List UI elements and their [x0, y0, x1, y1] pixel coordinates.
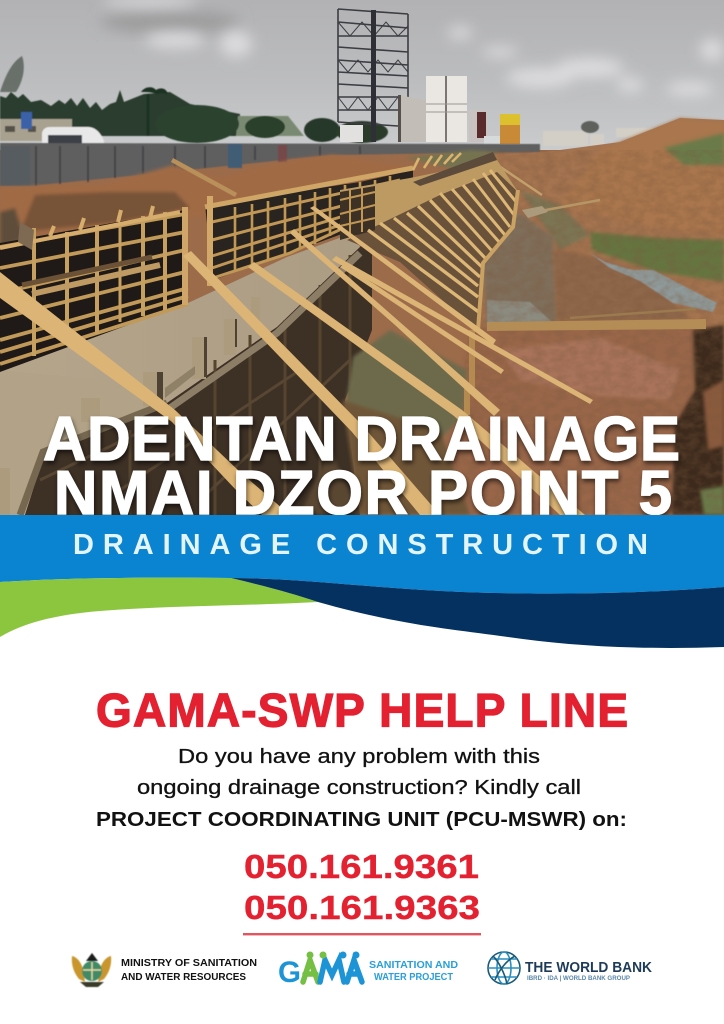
GAMA project name — [369, 960, 459, 983]
stray plank over the mound — [172, 160, 236, 195]
trees and buildings on the horizon — [0, 56, 662, 146]
red divider — [243, 933, 481, 935]
sky with clouds — [0, 0, 724, 150]
logo: ministry coat of arms — [72, 953, 111, 987]
ministry name: MINISTRY OF SANITATION — [121, 958, 257, 969]
navy swoosh — [231, 578, 724, 648]
GAMA project name: WATER PROJECT — [374, 972, 454, 983]
help line message: Do you have any problem with this — [178, 746, 540, 768]
trench water — [300, 330, 470, 515]
lower slab corner — [4, 452, 40, 515]
title — [43, 416, 681, 515]
logo: GAMA — [278, 952, 362, 989]
logo: GAMA: G — [278, 956, 301, 989]
World Bank name: THE WORLD BANK — [525, 960, 652, 976]
logo: World Bank globe — [488, 952, 520, 984]
help line message: ongoing drainage construction? Kindly call — [137, 777, 581, 799]
GAMA project name: SANITATION AND — [369, 960, 459, 971]
title: NMAI DZOR POINT 5 — [54, 458, 672, 527]
near formwork grid — [0, 206, 188, 372]
construction site photo — [0, 0, 724, 515]
help line message — [96, 746, 627, 831]
ministry name — [121, 958, 257, 983]
earth mounds behind the formwork — [0, 150, 500, 248]
subtitle: DRAINAGE CONSTRUCTION — [73, 529, 648, 561]
phone numbers: 050.161.9361 — [244, 848, 479, 885]
phone numbers: 050.161.9363 — [244, 889, 480, 926]
help line message: PROJECT COORDINATING UNIT (PCU-MSWR) on: — [96, 809, 627, 831]
title: ADENTAN DRAINAGE — [43, 404, 680, 473]
base ground — [0, 150, 560, 515]
World Bank name: IBRD · IDA | WORLD BANK GROUP — [527, 976, 630, 982]
billboard towers — [338, 9, 520, 144]
concrete slab — [4, 238, 360, 403]
green swoosh — [0, 578, 318, 637]
far formwork grid — [205, 153, 461, 286]
blue band — [0, 515, 724, 594]
dark trench wall — [20, 230, 372, 515]
excavated ground on the right — [430, 118, 724, 515]
ministry name: AND WATER RESOURCES — [121, 972, 246, 983]
long diagonal timber braces — [0, 206, 593, 515]
slab edge kerb and posts — [0, 253, 360, 515]
phone numbers — [244, 848, 480, 926]
help line heading: GAMA-SWP HELP LINE — [96, 684, 628, 737]
corrugated fence — [0, 143, 540, 186]
timber fan of braces — [340, 152, 518, 415]
